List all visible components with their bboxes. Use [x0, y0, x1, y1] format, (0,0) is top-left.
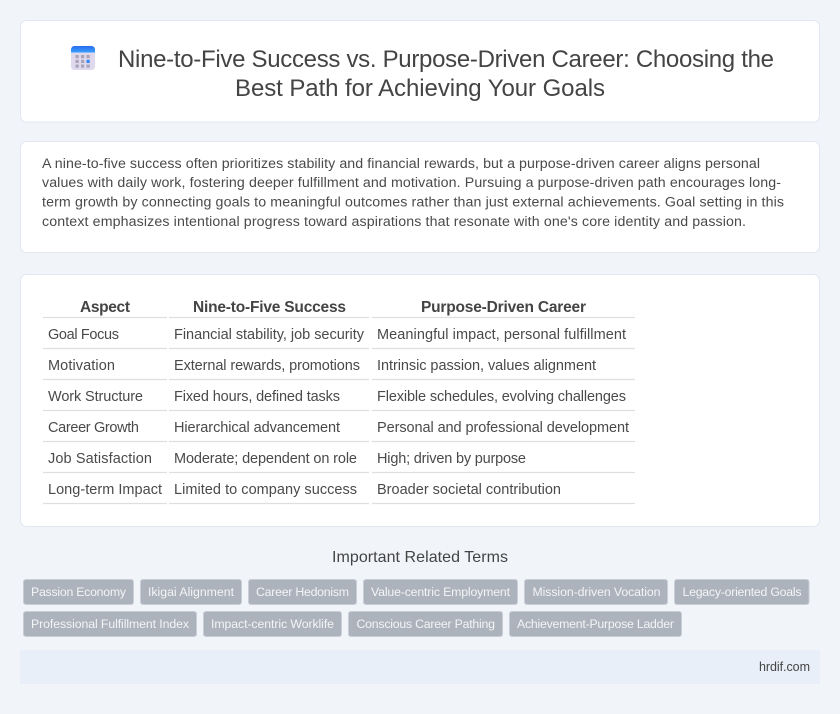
row: Job Satisfaction: Job Satisfaction	[48, 451, 152, 467]
tag: Mission-driven Vocation: Mission-driven Vocation	[532, 585, 661, 599]
row: Long-term Impact: Broader societal contribution	[377, 482, 561, 498]
row: Motivation: External rewards, promotions	[174, 358, 360, 374]
panel: introduction paragraph	[20, 142, 820, 252]
footer text: hrdif.com	[759, 660, 810, 674]
row: Work Structure: Fixed hours, defined tasks	[174, 389, 340, 405]
intro text: values with daily work, fostering deeper fulfillment and motivation. Pursuing a purpose-driven path encourages long-	[42, 175, 781, 191]
table header row: Nine-to-Five Success	[193, 299, 346, 316]
tag: Value-centric Employment	[364, 580, 518, 604]
row: Work Structure: Flexible schedules, evolving challenges	[377, 389, 626, 405]
row: Long-term Impact: Long-term Impact	[48, 482, 162, 498]
tag: Legacy-oriented Goals: Legacy-oriented Goals	[682, 585, 802, 599]
row: Goal Focus: Meaningful impact, personal fulfillment	[377, 327, 626, 343]
title: Nine-to-Five Success vs. Purpose-Driven Career: Choosing the	[118, 46, 774, 73]
intro text: term growth by connecting goals to meaningful outcomes rather than just external achievements. Goal setting in this	[42, 194, 784, 210]
row: Career Growth: Hierarchical advancement	[174, 420, 340, 436]
heading: related terms: Important Related Terms	[332, 549, 508, 566]
panel: comparison table	[20, 274, 820, 526]
tag: Conscious Career Pathing	[348, 612, 502, 636]
tag: Value-centric Employment: Value-centric Employment	[371, 585, 511, 599]
tag: Achievement-Purpose Ladder	[510, 612, 682, 636]
icon: calendar	[71, 46, 95, 70]
row: Career Growth: Career Growth	[48, 420, 139, 436]
tag: Career Hedonism	[248, 580, 356, 604]
row: Job Satisfaction: Moderate; dependent on role	[174, 451, 357, 467]
row: Job Satisfaction: High; driven by purpose	[377, 451, 526, 467]
row: Career Growth: Personal and professional development	[377, 420, 629, 436]
tag: Ikigai Alignment: Ikigai Alignment	[148, 585, 235, 599]
tag: Career Hedonism: Career Hedonism	[256, 585, 349, 599]
tag: Achievement-Purpose Ladder: Achievement-Purpose Ladder	[517, 617, 674, 631]
row: Job Satisfaction	[48, 451, 526, 467]
intro text: A nine-to-five success often prioritizes stability and financial rewards, but a purpose-driven career aligns personal	[42, 156, 760, 172]
row: Long-term Impact: Limited to company success	[174, 482, 357, 498]
related term tags	[24, 580, 809, 636]
tag: Conscious Career Pathing: Conscious Career Pathing	[356, 617, 495, 631]
row: Motivation: Intrinsic passion, values alignment	[377, 358, 596, 374]
panel: title header	[20, 20, 820, 122]
row: Work Structure: Work Structure	[48, 389, 143, 405]
table header row: Purpose-Driven Career	[421, 299, 586, 316]
row: Goal Focus	[48, 327, 626, 343]
tag: Impact-centric Worklife: Impact-centric Worklife	[211, 617, 334, 631]
row: Goal Focus: Goal Focus	[48, 327, 119, 343]
tag: Passion Economy	[24, 580, 134, 604]
tag: Professional Fulfillment Index: Professional Fulfillment Index	[31, 617, 190, 631]
tag: Professional Fulfillment Index	[24, 612, 196, 636]
intro text	[42, 156, 784, 230]
row: Work Structure	[48, 389, 626, 405]
row: Career Growth	[48, 420, 629, 436]
footer bar	[20, 650, 820, 684]
table header row	[80, 299, 586, 316]
tag: Ikigai Alignment	[140, 580, 242, 604]
tag: Legacy-oriented Goals	[674, 580, 809, 604]
row: Long-term Impact	[48, 482, 561, 498]
title: Best Path for Achieving Your Goals	[235, 75, 605, 102]
tag: Impact-centric Worklife	[204, 612, 342, 636]
title	[118, 46, 774, 102]
row: Goal Focus: Financial stability, job security	[174, 327, 365, 343]
row: Motivation	[48, 358, 596, 374]
intro text: context emphasizes intentional progress toward aspirations that resonate with one's core identity and passion.	[42, 214, 746, 230]
row: Motivation: Motivation	[48, 358, 115, 374]
tag: Passion Economy: Passion Economy	[31, 585, 127, 599]
tag: Mission-driven Vocation	[524, 580, 668, 604]
table header row: Aspect	[80, 299, 130, 316]
